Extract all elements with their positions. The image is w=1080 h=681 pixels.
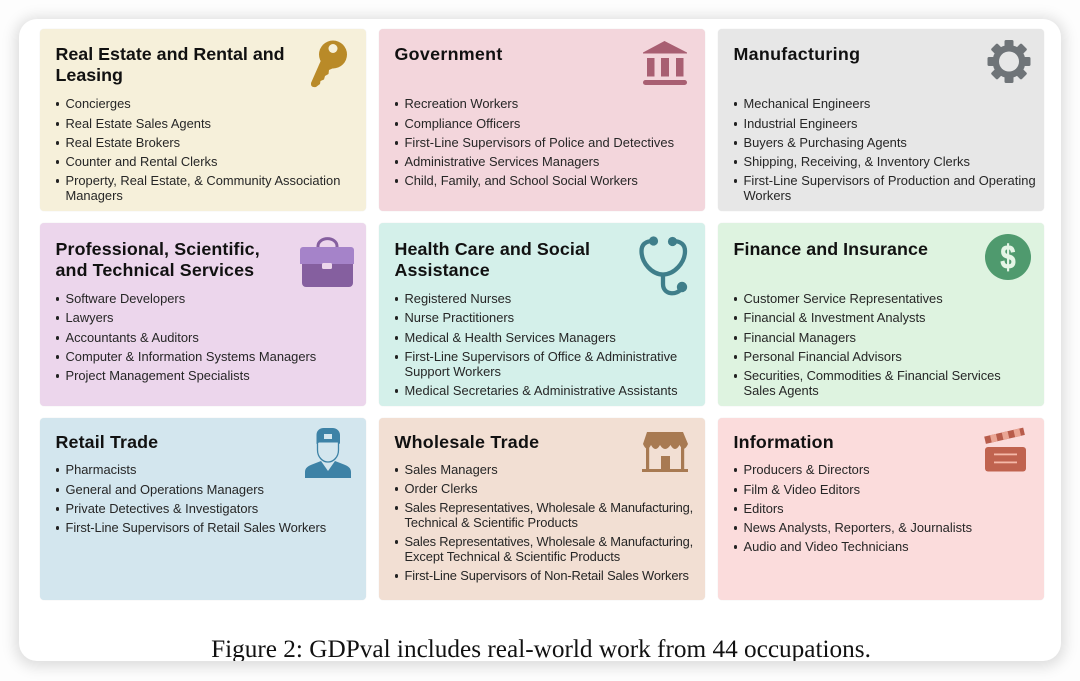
panel: Wholesale Trade — [379, 418, 705, 600]
panel: Finance and Insurance: Securities, Commodities & Financial Services — [744, 368, 1001, 383]
occupation list: Wholesale Trade — [395, 462, 693, 583]
panel: Manufacturing: First-Line Supervisors of Production and Operating — [744, 173, 1036, 188]
heading: Information: Information — [734, 432, 834, 452]
panel: Wholesale Trade: Sales Representatives, Wholesale & Manufacturing, — [404, 534, 693, 549]
panel: Retail Trade: Pharmacists — [66, 462, 136, 477]
panel: Real Estate and Rental and Leasing: Property, Real Estate, & Community Association — [66, 173, 340, 188]
heading: Professional — [56, 238, 260, 280]
heading: Health Care — [394, 238, 590, 280]
icon: dollar coin — [985, 234, 1031, 280]
panel: Manufacturing: Buyers & Purchasing Agents — [744, 135, 907, 150]
heading: Professional: Professional, Scientific, — [56, 238, 260, 258]
occupation list: Manufacturing — [734, 96, 1036, 203]
heading: Real Estate: Real Estate and Rental and — [56, 44, 285, 64]
panel: Manufacturing: Industrial Engineers — [744, 116, 857, 131]
icon: gear — [988, 40, 1030, 83]
panel: Wholesale Trade: Order Clerks — [404, 481, 478, 496]
panel: Health Care and Social Assistance: First-Line Supervisors of Office & Administrative — [404, 349, 677, 364]
panel: Manufacturing — [718, 29, 1044, 211]
heading: Real Estate — [56, 44, 285, 84]
icon: government building — [643, 41, 687, 85]
panel: Professional, Scientific, and Technical Services: Accountants & Auditors — [66, 330, 199, 345]
occupation list: Government — [395, 96, 674, 188]
panel: Professional, Scientific, and Technical Services — [40, 223, 366, 406]
panel: Government: Compliance Officers — [404, 116, 520, 131]
panel: Wholesale Trade: Sales Managers — [404, 462, 498, 477]
panel: Manufacturing: Mechanical Engineers — [744, 96, 870, 111]
panel: Health Care and Social Assistance: Nurse Practitioners — [404, 310, 514, 325]
panel: Information: Audio and Video Technicians — [744, 539, 909, 554]
heading: Retail Trade: Retail Trade — [56, 432, 158, 452]
occupation list: Finance — [734, 291, 1001, 398]
panel: Real Estate and Rental and Leasing: Managers — [66, 188, 123, 203]
panel: Retail Trade: General and Operations Managers — [66, 482, 264, 497]
heading: Health Care: Assistance — [394, 260, 490, 280]
occupation list: Professional — [56, 291, 316, 383]
panel: Information — [718, 418, 1044, 600]
panel: Health Care and Social Assistance — [379, 223, 705, 406]
panel: Finance and Insurance: Sales Agents — [744, 383, 819, 398]
icon: key — [311, 40, 347, 88]
panel: Wholesale Trade: Sales Representatives, Wholesale & Manufacturing, — [404, 500, 693, 515]
panel: Government: Recreation Workers — [404, 96, 518, 111]
panel: Health Care and Social Assistance: Medical & Health Services Managers — [404, 330, 616, 345]
panel: Information: Producers & Directors — [744, 462, 870, 477]
panel: Wholesale Trade: Except Technical & Scientific Products — [404, 549, 620, 564]
panel: Manufacturing: Shipping, Receiving, & Inventory Clerks — [744, 154, 970, 169]
panel: Professional, Scientific, and Technical Services: Software Developers — [66, 291, 185, 306]
panel: Professional, Scientific, and Technical Services: Lawyers — [66, 310, 114, 325]
panel: Retail Trade: First-Line Supervisors of Retail Sales Workers — [66, 520, 326, 535]
panel: Finance and Insurance: Personal Financial Advisors — [744, 349, 902, 364]
heading: Health Care: Health Care and Social — [394, 238, 590, 258]
occupation list: Health Care — [395, 291, 678, 398]
icon: storefront — [642, 432, 688, 472]
panel: Wholesale Trade: First-Line Supervisors of Non-Retail Sales Workers — [404, 568, 689, 583]
occupation list: Real Estate — [56, 96, 340, 203]
panel: Health Care and Social Assistance: Support Workers — [404, 364, 501, 379]
panel: Wholesale Trade: Technical & Scientific Products — [404, 515, 578, 530]
icon: stethoscope — [639, 236, 688, 296]
panel: Finance and Insurance — [718, 223, 1044, 406]
panel: Government — [379, 29, 705, 211]
panel: Finance and Insurance: Financial & Investment Analysts — [744, 310, 926, 325]
panel: Finance and Insurance: Financial Managers — [744, 330, 856, 345]
panel: Real Estate and Rental and Leasing: Real Estate Brokers — [66, 135, 180, 150]
panel: Government: Administrative Services Managers — [404, 154, 599, 169]
panel: Finance and Insurance: Customer Service Representatives — [744, 291, 943, 306]
panel: Retail Trade: Private Detectives & Investigators — [66, 501, 258, 516]
icon: uniformed worker — [305, 428, 351, 478]
icon: briefcase — [300, 237, 354, 287]
panel: Information: Film & Video Editors — [744, 482, 860, 497]
occupation list: Information — [734, 462, 972, 554]
panel: Information: News Analysts, Reporters, & Journalists — [744, 520, 972, 535]
panel: Health Care and Social Assistance: Medical Secretaries & Administrative Assistants — [404, 383, 678, 398]
heading: Wholesale Trade: Wholesale Trade — [394, 432, 539, 452]
panel: Real Estate and Rental and Leasing: Concierges — [66, 96, 131, 111]
panel: Professional, Scientific, and Technical Services: Project Management Specialists — [66, 368, 250, 383]
panel: Real Estate and Rental and Leasing — [40, 29, 366, 211]
heading: Manufacturing: Manufacturing — [734, 44, 860, 64]
panel: Health Care and Social Assistance: Registered Nurses — [404, 291, 511, 306]
panel: Real Estate and Rental and Leasing: Counter and Rental Clerks — [66, 154, 217, 169]
icon: dollar coin: $ — [1000, 240, 1016, 276]
panel: Government: Child, Family, and School Social Workers — [404, 173, 638, 188]
panel: Information: Editors — [744, 501, 784, 516]
heading: Real Estate: Leasing — [56, 64, 123, 84]
panel: Retail Trade — [40, 418, 366, 600]
panel: Real Estate and Rental and Leasing: Real Estate Sales Agents — [66, 116, 211, 131]
panel: Professional, Scientific, and Technical Services: Computer & Information Systems Managers — [66, 349, 316, 364]
panel: Government: First-Line Supervisors of Police and Detectives — [404, 135, 674, 150]
occupation list: Retail Trade — [56, 462, 326, 535]
heading: Finance: Finance and Insurance — [734, 238, 928, 258]
heading: Professional: and Technical Services — [56, 260, 254, 280]
icon: clapperboard — [984, 428, 1026, 472]
heading: Government: Government — [394, 44, 503, 64]
panel: Manufacturing: Workers — [744, 188, 791, 203]
